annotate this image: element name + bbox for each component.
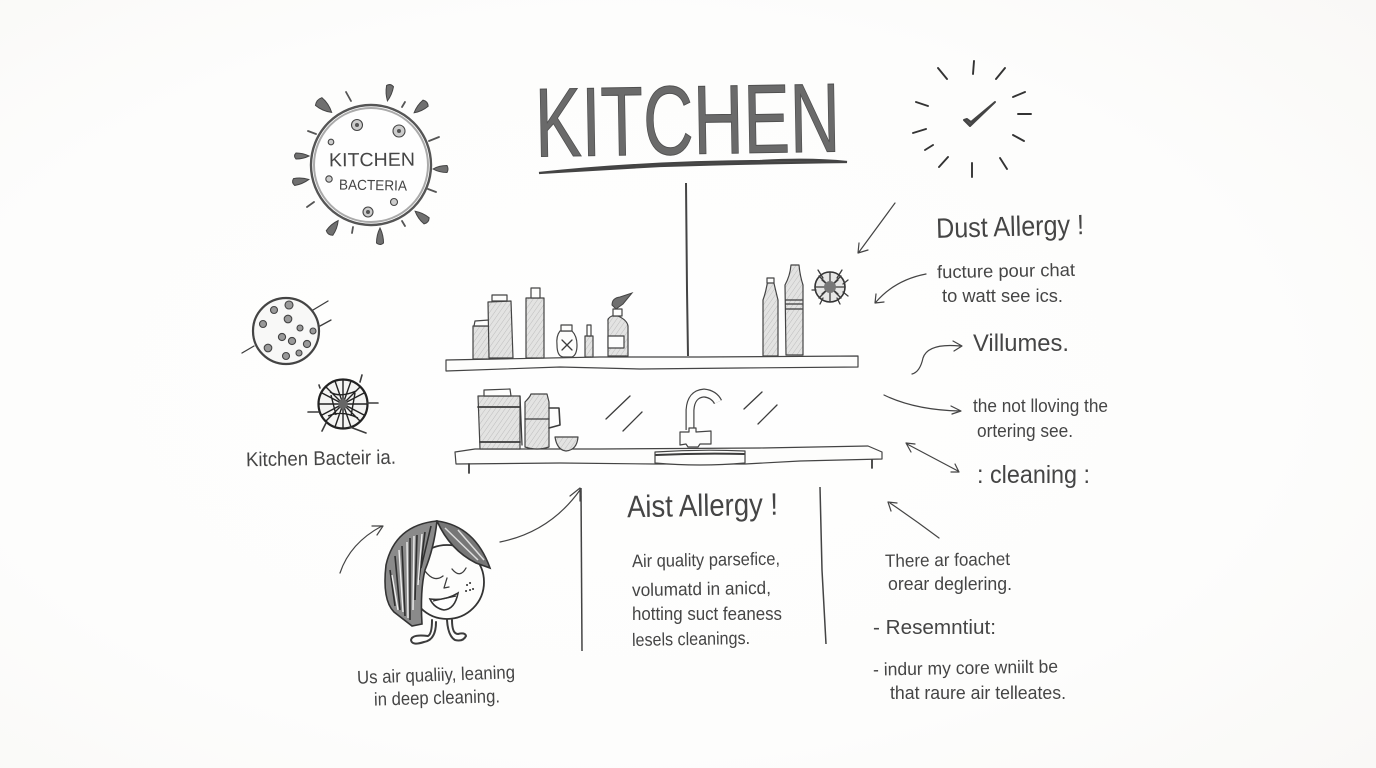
text: shelf note: the not lloving the xyxy=(973,396,1108,416)
text: aist allergy heading: Aist Allergy ! xyxy=(627,487,778,524)
text: dust allergy body: to watt see ics. xyxy=(942,286,1063,306)
vertical divider top xyxy=(686,183,688,356)
arrow: volumes xyxy=(912,341,962,374)
text: dust allergy body xyxy=(937,260,1075,306)
counter with sink xyxy=(455,389,882,473)
text: foachet note: orear deglering. xyxy=(888,574,1012,594)
icon: kitchen bacteria circle xyxy=(292,84,448,245)
text: air quality paragraph: lesels cleanings. xyxy=(632,628,750,650)
text: bullet note: that raure air telleates. xyxy=(890,683,1066,703)
icon: kitchen bacteria circle: KITCHEN xyxy=(329,150,415,171)
text: air quality paragraph: Air quality parsefice, xyxy=(632,549,780,571)
arrow: to face xyxy=(340,526,383,573)
text: bullet note xyxy=(873,656,1066,703)
icon: spider germ on shelf xyxy=(812,270,848,304)
text: bullet note: - indur my core wniilt be xyxy=(873,656,1058,680)
upper shelf xyxy=(446,265,858,371)
arrow: shelf to text xyxy=(884,395,961,414)
text: shelf note xyxy=(973,396,1108,441)
text: cleaning: : cleaning : xyxy=(977,461,1090,489)
icon: cracked germ xyxy=(308,375,378,433)
text: shelf note: ortering see. xyxy=(977,421,1073,441)
window reflection marks xyxy=(606,392,777,431)
illustration: smiling character xyxy=(385,521,490,644)
appliances: blender, jug and bowl xyxy=(478,389,578,451)
icon: clock with tick xyxy=(913,61,1031,177)
icon: dotted germ xyxy=(242,298,331,364)
title: KITCHEN xyxy=(534,62,841,178)
bottle group: jars and bottles xyxy=(473,265,803,359)
text: dust allergy body: fucture pour chat xyxy=(937,260,1075,282)
icon: kitchen bacteria circle: BACTERIA xyxy=(339,177,407,195)
arrow: to counter from right xyxy=(888,502,939,538)
text: character caption xyxy=(357,661,515,710)
text: air quality paragraph: hotting suct feaness xyxy=(632,604,782,624)
text: villumes: Villumes. xyxy=(973,330,1069,357)
text: foachet note: There ar foachet xyxy=(885,549,1010,571)
text: foachet note xyxy=(885,549,1012,594)
panel divider right xyxy=(820,487,826,644)
arrow: dust text to germ xyxy=(875,274,926,303)
text: air quality paragraph: volumatd in anicd, xyxy=(632,578,771,600)
arrow: to spider germ xyxy=(858,203,895,253)
text: kitchen bacteria caption: Kitchen Bacteir ia. xyxy=(246,447,396,471)
text: air quality paragraph xyxy=(632,549,782,650)
text: character caption: Us air qualiiy, leaning xyxy=(357,661,515,688)
arrow: double headed cleaning xyxy=(906,443,959,472)
text: resemntiut: - Resemntiut: xyxy=(873,617,996,639)
text: dust allergy heading: Dust Allergy ! xyxy=(936,209,1084,244)
arrow: face to panel xyxy=(500,488,580,542)
panel divider left xyxy=(581,488,582,651)
text: character caption: in deep cleaning. xyxy=(374,685,500,710)
icon: faucet xyxy=(680,393,718,447)
